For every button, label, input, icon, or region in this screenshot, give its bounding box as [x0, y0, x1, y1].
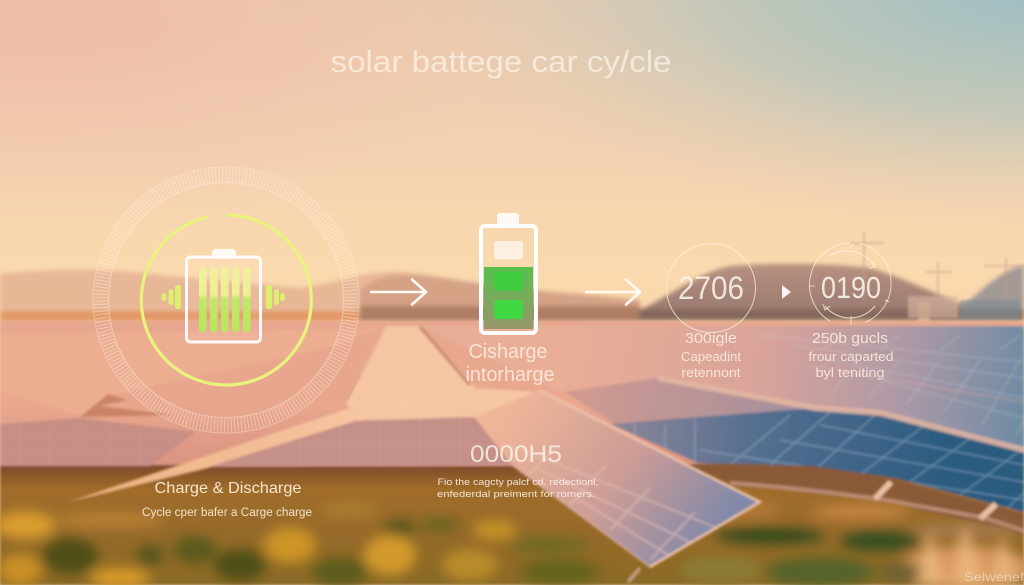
centre figure and note: enfederdal preiment for romers.	[437, 489, 595, 500]
metric: capacity retention: Capeadint	[681, 349, 741, 364]
background: centre light panel and strip	[68, 326, 760, 582]
arrow to battery	[371, 280, 426, 304]
green progress ring	[141, 215, 311, 385]
arrow to metrics	[586, 280, 640, 304]
centre figure and note	[437, 441, 598, 500]
battery icon with bars	[186, 249, 260, 342]
charging battery icon	[481, 213, 536, 333]
charge and discharge caption: Cycle cper bafer a Carge charge	[142, 507, 312, 519]
left charge waves	[162, 285, 181, 309]
battery caption: intorharge	[466, 364, 554, 386]
metric: capacity retention: retennont	[682, 365, 741, 380]
metric: capacity retention: 2706	[678, 270, 744, 306]
right charge waves	[266, 285, 285, 309]
blue panel	[610, 408, 1024, 512]
centre figure and note: 0000H5	[470, 441, 562, 468]
support rails	[730, 483, 1024, 531]
metric: cycles with circular arrows: 0190	[821, 270, 881, 305]
left lower panel	[0, 418, 195, 466]
charge and discharge emblem	[93, 167, 359, 433]
panel below strip	[208, 417, 512, 467]
background: solar field and ground	[0, 321, 1024, 585]
background: distant mountains and horizon	[0, 264, 1024, 322]
tick ring	[93, 167, 359, 433]
charge and discharge caption	[142, 480, 312, 519]
metric: cycles with circular arrows	[808, 243, 894, 380]
upper panel light beams	[658, 376, 1024, 453]
metric: cycles with circular arrows: byl teniting	[816, 365, 884, 380]
background: foreground grass	[0, 501, 1024, 585]
charge and discharge caption: Charge & Discharge	[154, 480, 302, 497]
battery caption	[466, 341, 554, 386]
small triangle pointer	[782, 285, 791, 299]
mauve panel	[565, 378, 815, 424]
title: solar battege car cy/cle	[330, 44, 672, 79]
metric: cycles with circular arrows: frour caparted	[808, 349, 894, 364]
ground	[0, 465, 1024, 585]
background: distant pylons and buildings	[850, 232, 1024, 324]
metric: capacity retention: 300igle	[685, 330, 737, 347]
centre figure and note: Fio the cagcty palcf cd. redectionl,	[438, 477, 598, 488]
left panel highlights	[0, 328, 380, 416]
dark gap between panels	[346, 330, 386, 402]
watermark: Selwenef	[964, 570, 1024, 584]
right upper panel array	[420, 326, 1024, 450]
metric: cycles with circular arrows: 250b gucls	[812, 330, 888, 347]
metric: capacity retention	[666, 244, 756, 380]
front solar panel	[475, 390, 760, 567]
battery caption: Cisharge	[468, 341, 548, 363]
background: sky	[0, 0, 1024, 330]
dark bed below blue panels	[690, 464, 1024, 535]
